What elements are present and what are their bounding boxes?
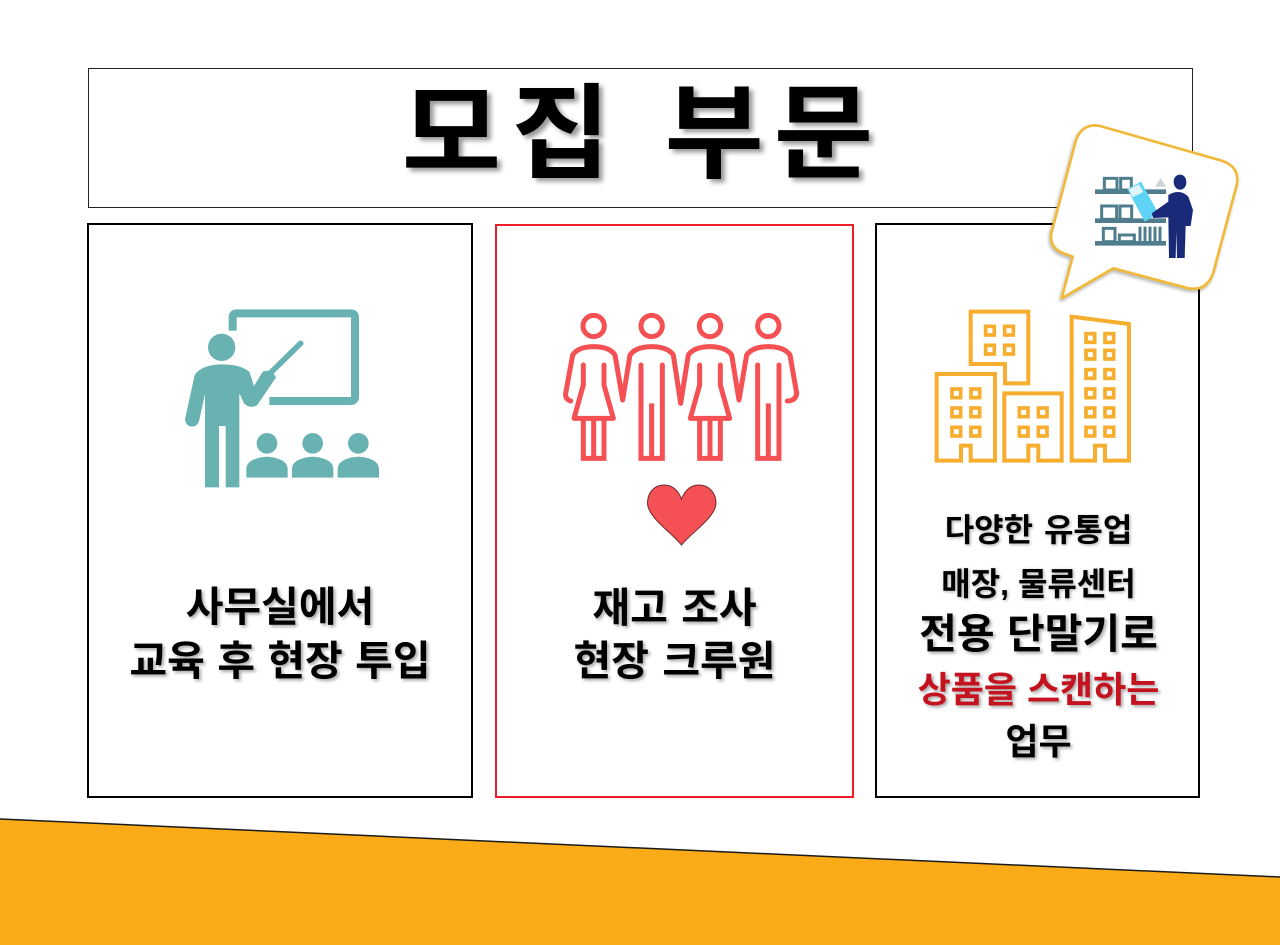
icon: heart <box>647 484 716 546</box>
panel: office training <box>87 223 473 798</box>
text: scanning work: 다양한 유통업 <box>945 512 1132 548</box>
icon: buildings <box>934 310 1131 463</box>
icon: worker <box>1152 175 1193 258</box>
title: 모집 부문 <box>402 76 883 191</box>
icon: shelves <box>1095 178 1166 243</box>
panel: inventory crew <box>495 224 854 798</box>
speech bubble shape <box>1051 125 1237 298</box>
text: office training <box>129 584 431 684</box>
text: office training: 사무실에서 <box>186 584 374 630</box>
text: inventory crew: 재고 조사 <box>592 585 757 631</box>
title panel <box>88 68 1193 208</box>
panel: scanning work <box>875 223 1200 798</box>
text: office training: 교육 후 현장 투입 <box>129 638 431 684</box>
text: inventory crew: 현장 크루원 <box>574 638 776 684</box>
text: scanning work: 상품을 스캔하는 <box>918 669 1159 710</box>
icon: handheld scanner <box>1127 182 1158 222</box>
icon: teacher at board <box>185 309 379 488</box>
text: inventory crew <box>574 585 776 684</box>
icon: four people <box>563 312 800 461</box>
text: scanning work: 업무 <box>1005 721 1072 762</box>
text: scanning work <box>918 512 1162 762</box>
text: scanning work: 전용 단말기로 <box>919 611 1158 657</box>
text: scanning work: 매장, 물류센터 <box>941 566 1136 602</box>
callout: speech bubble with scanning worker <box>1047 124 1240 303</box>
